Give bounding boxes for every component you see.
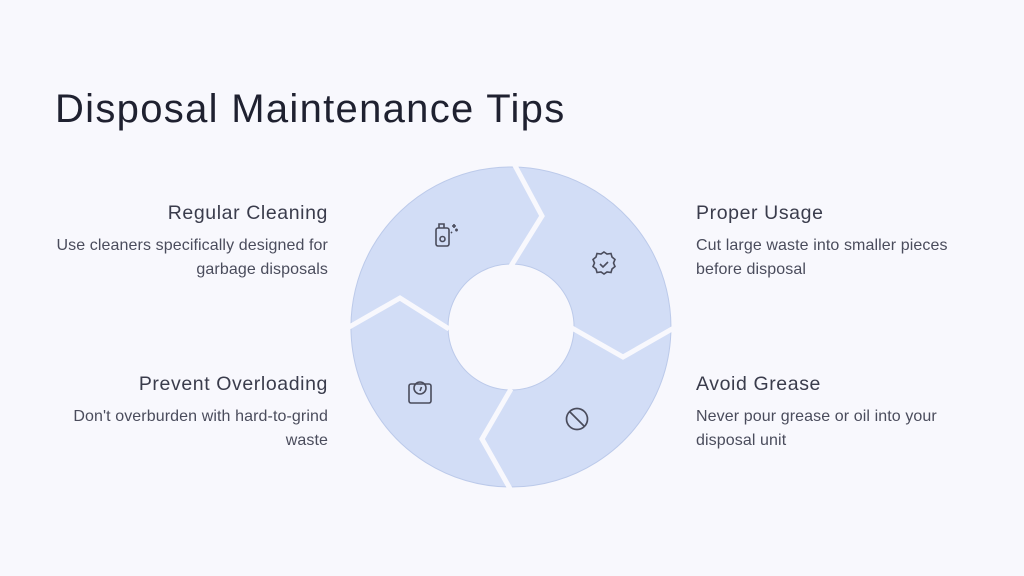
ring xyxy=(344,160,679,494)
text: regular cleaning: Regular Cleaning xyxy=(168,202,328,224)
text: avoid grease: disposal unit xyxy=(696,432,786,449)
icon: badge check xyxy=(593,252,615,274)
title: Disposal Maintenance Tips xyxy=(55,87,566,131)
text: avoid grease xyxy=(696,373,937,449)
text: proper usage: before disposal xyxy=(696,261,806,278)
text: avoid grease: Avoid Grease xyxy=(696,373,821,395)
icon: prohibited xyxy=(566,408,588,430)
icon: scale xyxy=(409,382,431,403)
text: regular cleaning: Use cleaners specifically designed for xyxy=(56,237,328,254)
text: proper usage: Proper Usage xyxy=(696,202,824,224)
text: proper usage xyxy=(696,202,948,278)
text: prevent overloading: waste xyxy=(286,432,328,449)
text: avoid grease: Never pour grease or oil into your xyxy=(696,408,937,425)
text: prevent overloading: Prevent Overloading xyxy=(139,373,328,395)
text: regular cleaning: garbage disposals xyxy=(196,261,328,278)
text: regular cleaning xyxy=(56,202,328,278)
icon: spray bottle xyxy=(436,224,458,246)
text: prevent overloading xyxy=(73,373,328,449)
text: proper usage: Cut large waste into smaller pieces xyxy=(696,237,948,254)
text: prevent overloading: Don't overburden with hard-to-grind xyxy=(73,408,328,425)
